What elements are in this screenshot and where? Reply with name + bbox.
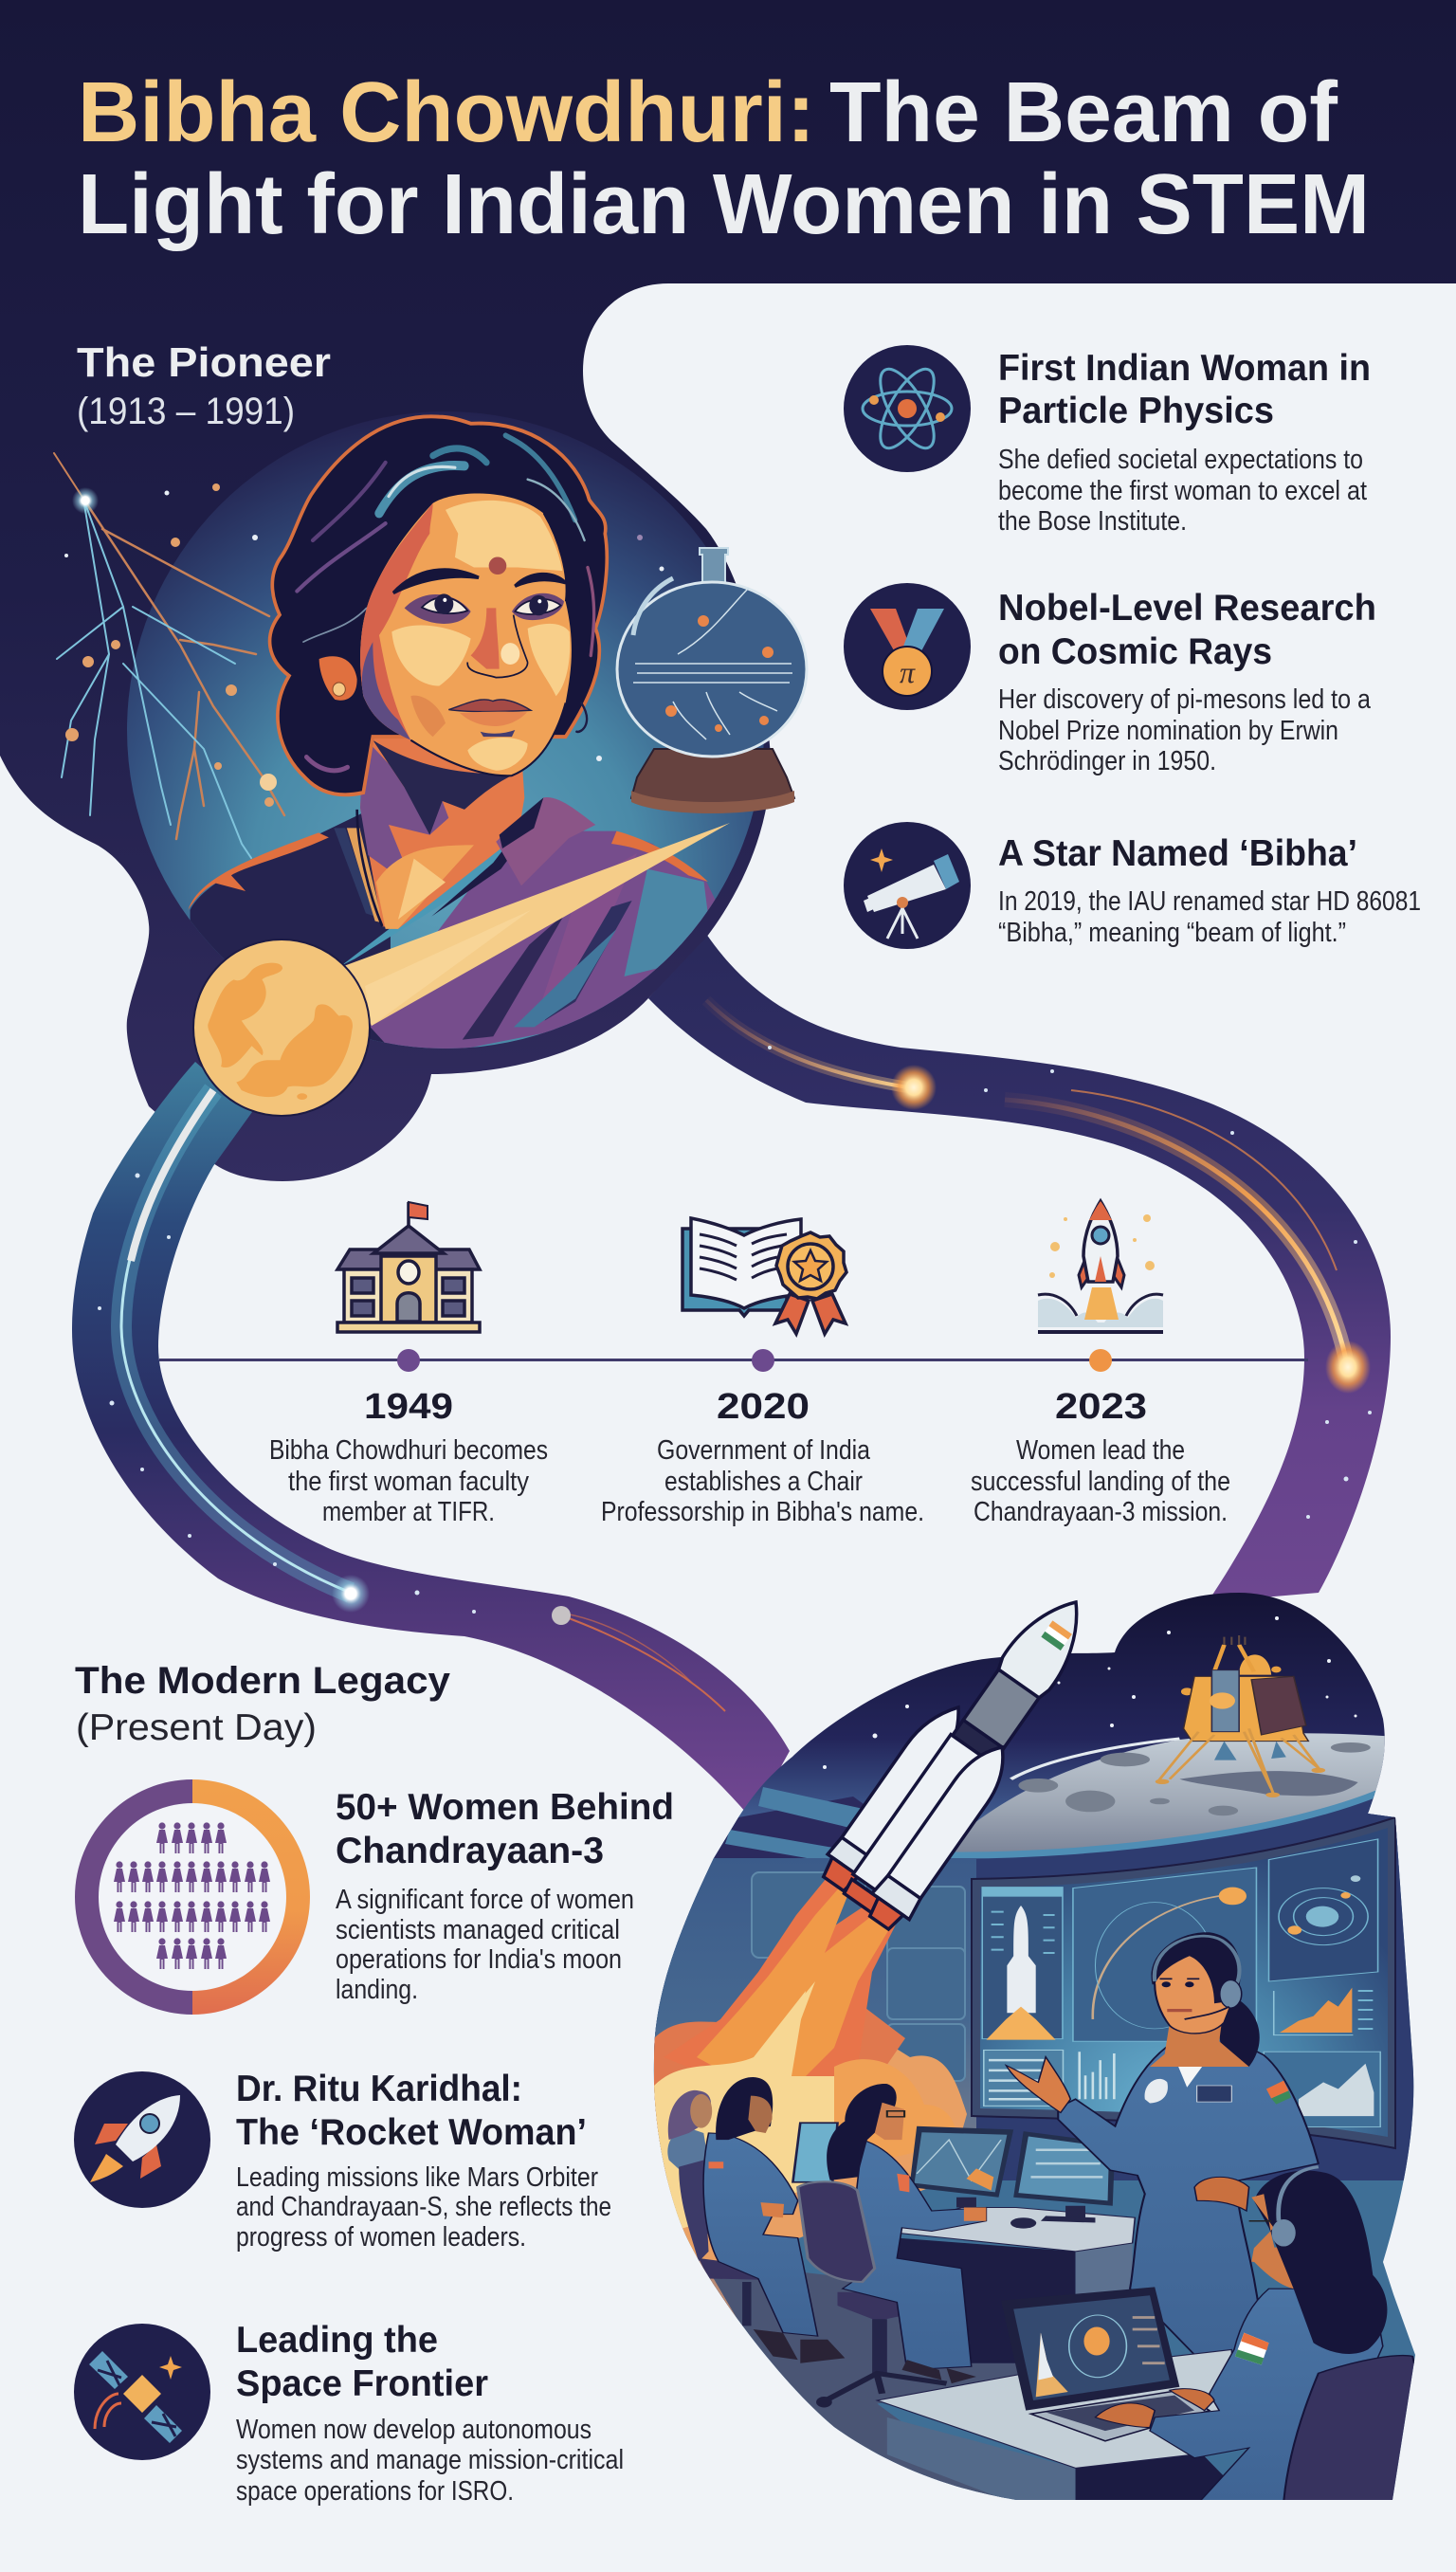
fact: Dr. Ritu Karidhal: progress of women leaders. [236,2222,526,2253]
portrait: Bibha Chowdhuri [188,416,730,1055]
ear and earring [319,656,357,701]
title [78,65,1370,252]
lead scientist head [1150,1932,1260,2067]
ribbon stars [98,1174,476,1614]
fact: leading the space frontier [74,2320,624,2507]
title line two: Light for Indian Women in STEM [78,157,1370,252]
fact: Dr. Ritu Karidhal: Leading missions like Mars Orbiter [236,2162,598,2193]
small monitor [792,2123,838,2182]
heading: the pioneer [77,339,331,432]
milestone: 2023 [971,1201,1230,1527]
fact: leading the space frontier: Leading the [236,2320,438,2361]
launch vehicle [812,1568,1113,1936]
moon patches [208,963,353,1100]
wall panels [752,1872,965,2081]
icon: cosmic ray branches [54,453,284,858]
icon: university building [337,1202,480,1332]
sky [709,1593,1399,1868]
mountain chart [1264,2052,1380,2127]
fact: Dr. Ritu Karidhal [74,2069,611,2253]
flask: cloud chamber on stand [617,548,807,813]
teal halo behind portrait [127,411,764,1049]
stat: 50+ women: A significant force of women [336,1885,634,1915]
milestone: 1949: Bibha Chowdhuri becomes [269,1435,548,1466]
grey meteor with red trail [552,1606,725,1711]
fact: Nobel-level research: Schrödinger in 1950. [998,746,1216,776]
fact: a star named Bibha: “Bibha,” meaning “beam of light.” [998,918,1346,948]
milestone: 2020: Government of India [657,1435,871,1466]
eye sockets [405,594,471,624]
fact: first Indian woman: the Bose Institute. [998,506,1187,537]
donut chart with people [75,1779,310,2015]
heading: the pioneer: (1913 – 1991) [77,391,295,432]
fact: leading the space frontier: Women now develop autonomous [236,2415,592,2445]
icon: rocket launch [1038,1201,1163,1334]
milestone: 1949: the first woman faculty [288,1467,529,1497]
dot [752,1349,774,1372]
data panel [984,2050,1063,2106]
heading: the modern legacy [75,1660,451,1748]
fact: first Indian woman: First Indian Woman in [998,348,1371,389]
stat: 50+ women: operations for India's moon [336,1944,622,1975]
front desk [877,2349,1249,2502]
blouse and saree [188,813,715,1049]
ceiling and back wall [654,1773,1422,2180]
title line one: Bibha Chowdhuri: [78,65,815,160]
milestone: 1949 [269,1202,548,1527]
milestone: 1949: member at TIFR. [322,1497,495,1527]
illustration: mission control with lander [645,1583,1431,2512]
fact: leading the space frontier: Space Frontier [236,2363,488,2404]
lunar surface [956,1733,1385,1852]
lips [448,700,531,712]
big monitor wall [972,1817,1395,2148]
fact: a star named Bibha: A Star Named ‘Bibha’ [998,833,1357,874]
bar chart [1080,2052,1114,2099]
fact: Nobel-level research: on Cosmic Rays [998,631,1272,672]
comet head two [1325,1341,1371,1394]
fact: first Indian woman: become the first woman to excel at [998,476,1367,506]
stat: 50+ women: landing. [336,1975,418,2005]
tail [341,823,730,1026]
teal light streak [121,1090,351,1593]
fact: first Indian woman: Particle Physics [998,391,1274,431]
dark header and portrait blob [0,0,1456,1181]
centre desk with monitors [897,2126,1135,2363]
left ribbon: teal to purple stream [72,1062,790,1819]
stand [631,749,794,810]
laptop [1001,2287,1210,2441]
fact: Dr. Ritu Karidhal: The ‘Rocket Woman’ [236,2112,587,2153]
milestone: 2020 [601,1218,924,1527]
ribbon stars [768,1046,1372,1519]
fact: Dr. Ritu Karidhal: Dr. Ritu Karidhal: [236,2069,522,2109]
floor [699,2260,1018,2498]
milestone: 2020: establishes a Chair [664,1467,863,1497]
comet trail two [1005,1090,1348,1369]
face [319,493,572,775]
heading: the pioneer: The Pioneer [77,339,331,386]
fact: Dr. Ritu Karidhal: and Chandrayaan-S, she reflects the [236,2192,611,2222]
lander [1156,1635,1325,1797]
icon: atom [844,345,971,472]
comet head one [891,1065,937,1110]
milestone: 2023: Chandrayaan-3 mission. [974,1497,1228,1527]
icon: telescope [844,822,971,949]
moon with comet tail [193,823,730,1116]
right booster [888,1736,1018,1899]
rocket panel [982,1888,1063,2039]
fact: leading the space frontier: systems and manage mission-critical [236,2445,624,2475]
heading: the modern legacy: The Modern Legacy [75,1660,451,1702]
sky stars [823,1616,1357,1769]
planet panel [1269,1839,1378,1981]
heading: the modern legacy: (Present Day) [76,1707,317,1748]
fairing flag [1041,1620,1072,1651]
brows [393,570,479,593]
moon disc [193,939,370,1116]
title: The Beam of [829,65,1338,160]
icon: medal: π [900,655,916,689]
fact: leading the space frontier: space operations for ISRO. [236,2476,514,2507]
icon: rocket [74,2071,210,2208]
dot [1089,1349,1112,1372]
icon: satellite [74,2324,210,2460]
glass neck [700,548,728,593]
fact: Nobel-level research [844,583,1376,776]
scene base fill [645,1801,1431,2512]
nose [467,615,528,678]
white comet [332,1575,370,1613]
fact: Nobel-level research: Nobel-Level Research [998,588,1376,629]
timeline [159,1201,1308,1527]
bindi [489,556,506,575]
timeline axis [159,1359,1308,1361]
neck and chest [357,723,595,929]
orbit panel [1073,1868,1256,2041]
stat: 50+ women [75,1779,674,2015]
front chair [1283,2356,1415,2502]
stat: 50+ women: Chandrayaan-3 [336,1831,604,1871]
milestone: 1949: 1949 [364,1387,453,1427]
left colleague [679,2077,845,2363]
fact: Nobel-level research: Her discovery of pi-mesons led to a [998,684,1372,715]
stat: 50+ women: 50+ Women Behind [336,1787,674,1828]
core stage [995,1586,1100,1700]
people and desks [654,2004,1415,2502]
right ribbon: navy to purple stream [648,934,1391,1602]
milestone: 2020: 2020 [717,1387,810,1427]
branch sparks [64,483,664,807]
milestone: 2023: Women lead the [1016,1435,1185,1466]
icon: medal [844,583,971,710]
lead scientist [1006,2004,1319,2355]
comet trail one [706,1000,914,1088]
fact: Nobel-level research: Nobel Prize nomination by Erwin [998,716,1338,746]
front scientist [1095,2167,1387,2502]
dot [397,1349,420,1372]
eyes [422,597,467,613]
milestone: 2023: 2023 [1055,1387,1147,1427]
stat: 50+ women: scientists managed critical [336,1915,620,1945]
left booster [842,1695,974,1860]
hair [270,416,607,794]
seated colleague [798,2084,986,2407]
icon: book with seal [682,1218,846,1334]
fact: a star named Bibha [844,822,1421,949]
growth chart [1280,1988,1352,2033]
fact: first Indian woman: She defied societal expectations to [998,445,1363,475]
bulb details [633,578,792,739]
milestone: 2020: Professorship in Bibha's name. [601,1497,924,1527]
rocket flames and smoke [654,1863,967,2294]
background colleague [667,2090,712,2174]
glass bulb [617,582,807,757]
milestone: 2023: successful landing of the [971,1467,1230,1497]
fact: first Indian woman [844,345,1371,537]
moon rim [947,1789,1388,1855]
